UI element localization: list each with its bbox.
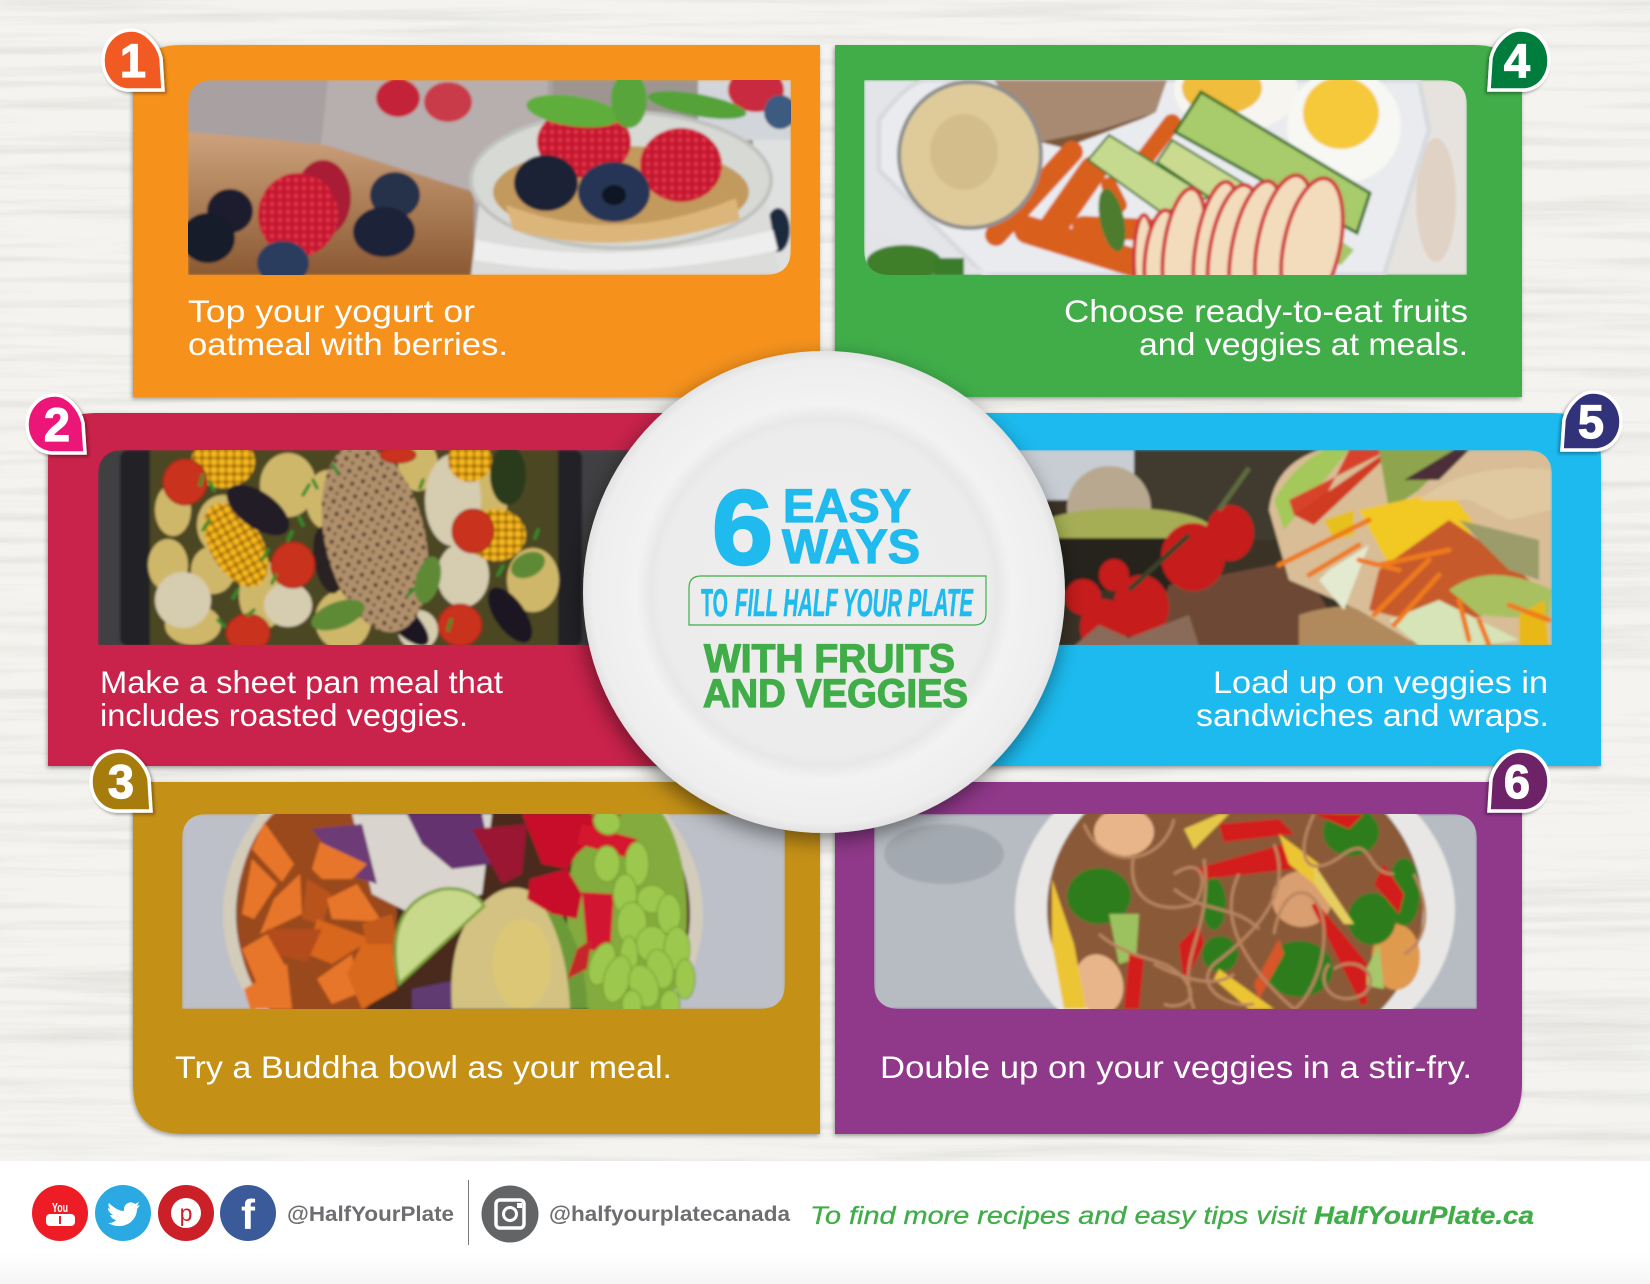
plate — [583, 351, 1065, 833]
icon: Facebook — [220, 1185, 276, 1241]
heading: with fruits and veggies: WITH FRUITS — [704, 637, 955, 681]
photo: sheet pan meal — [98, 450, 630, 645]
panel 3: Buddha bowl — [91, 724, 820, 1134]
icon: YouTube: You — [52, 1200, 68, 1215]
handle: HalfYourPlate: @HalfYourPlate — [287, 1203, 454, 1226]
badge 6 — [1489, 751, 1549, 811]
badge 2 — [27, 395, 85, 453]
panel 2: sheet pan — [27, 395, 720, 766]
text: tip 5: sandwiches and wraps. — [1196, 697, 1549, 733]
photo: veggie wrap — [1018, 450, 1552, 645]
panel 6: stir-fry — [835, 739, 1549, 1134]
badge 5 — [1562, 392, 1621, 450]
icon: Twitter — [95, 1185, 151, 1241]
badge 6: 6 — [1504, 755, 1530, 808]
badge 3: 3 — [108, 755, 134, 808]
icon: Instagram — [482, 1186, 538, 1242]
text: tip 5: Load up on veggies in — [1213, 664, 1548, 700]
subheading box: to fill half your plate: TO — [701, 582, 728, 625]
photo: snack box — [864, 80, 1467, 275]
text: tip 2: includes roasted veggies. — [100, 697, 468, 733]
heading: 6 easy ways: WAYS — [782, 521, 920, 574]
footer — [0, 1161, 1650, 1284]
text: tip 2: Make a sheet pan meal that — [100, 664, 503, 700]
text: tip 1: Top your yogurt or — [188, 293, 475, 329]
text: tip 4: Choose ready-to-eat fruits — [1064, 293, 1468, 329]
badge 4 — [1489, 30, 1549, 90]
panel 1: berries — [103, 30, 820, 397]
subheading box: to fill half your plate: FILL HALF YOUR PLATE — [735, 582, 974, 625]
divider — [468, 1180, 470, 1245]
icon: Pinterest — [158, 1185, 214, 1241]
icon: YouTube — [32, 1185, 88, 1241]
icon: Pinterest: p — [180, 1200, 192, 1226]
badge 1: 1 — [120, 34, 146, 87]
text: tip 3: Try a Buddha bowl as your meal. — [175, 1049, 672, 1085]
call to action: To find more recipes and easy tips visit — [810, 1202, 1307, 1230]
panel 4: ready-to-eat — [835, 30, 1549, 397]
photo: noodle stir-fry — [874, 814, 1477, 1009]
photo: Buddha bowl — [182, 814, 785, 1009]
icon: Facebook: f — [241, 1191, 256, 1238]
text: tip 4: and veggies at meals. — [1139, 326, 1468, 362]
text: tip 1 — [188, 293, 508, 362]
heading: 6 easy ways: EASY — [783, 479, 911, 532]
badge 1 — [103, 30, 163, 90]
photo: yogurt with berries — [188, 80, 791, 275]
heading: with fruits and veggies — [703, 637, 968, 716]
call to action: HalfYourPlate.ca — [1314, 1202, 1534, 1230]
call to action — [810, 1202, 1534, 1230]
badge 4: 4 — [1504, 34, 1530, 87]
badge 3 — [91, 751, 151, 811]
text: tip 1: oatmeal with berries. — [188, 326, 508, 362]
text: tip 5 — [1196, 664, 1549, 733]
badge 2: 2 — [44, 398, 70, 451]
subheading box: to fill half your plate — [689, 576, 986, 625]
text: tip 2 — [100, 664, 503, 733]
text: tip 6: Double up on your veggies in a stir-fry. — [880, 1049, 1472, 1085]
badge 5: 5 — [1578, 395, 1604, 448]
panel 5: wraps — [930, 392, 1621, 766]
text: tip 4 — [1064, 293, 1468, 362]
heading: 6 easy ways — [712, 469, 920, 587]
handle: halfyourplatecanada: @halfyourplatecanada — [549, 1203, 790, 1226]
heading: 6 easy ways: 6 — [712, 469, 773, 587]
heading: with fruits and veggies: AND VEGGIES — [703, 672, 968, 716]
